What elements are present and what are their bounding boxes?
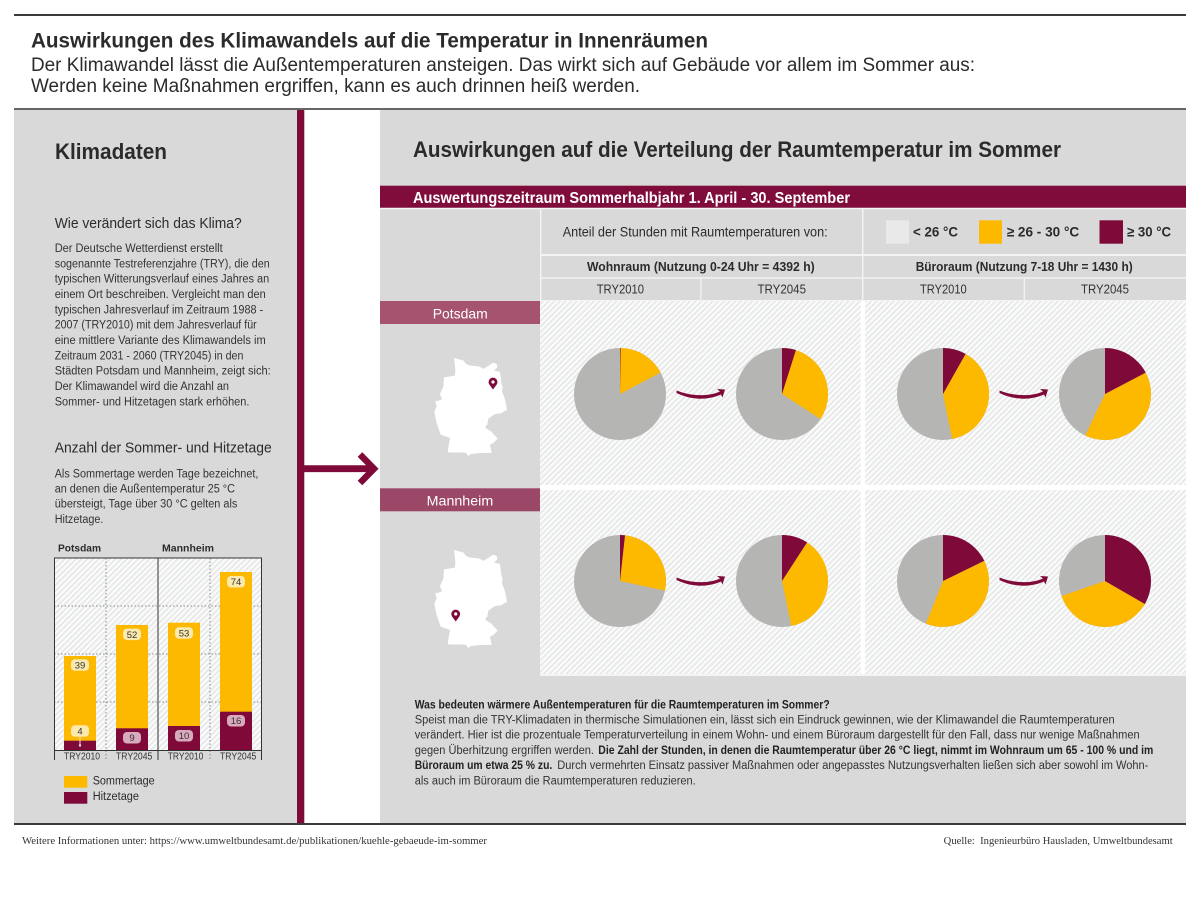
legend: temperature bands bbox=[886, 220, 1171, 244]
heading: Klimadaten: Klimadaten bbox=[55, 139, 167, 164]
text block: test reference years: Städten Potsdam und Mannheim, zeigt sich: bbox=[55, 366, 271, 378]
text block: definition of days bbox=[55, 468, 258, 526]
pie: Mannheim Wohnraum TRY2045 bbox=[736, 535, 828, 627]
label: Mannheim: Mannheim bbox=[427, 493, 493, 509]
column header: Büroraum: Büroraum (Nutzung 7-18 Uhr = 1430 h) bbox=[916, 260, 1133, 274]
bar: Mannheim TRY2045: 74 bbox=[231, 577, 241, 588]
pie: Potsdam Wohnraum TRY2045 bbox=[736, 348, 828, 440]
bar: Mannheim TRY2010: 10 bbox=[179, 731, 189, 742]
subheading: climate question: Wie verändert sich das Klima? bbox=[55, 216, 242, 232]
chart column headings: Mannheim bbox=[162, 543, 214, 555]
bar: Mannheim TRY2045 bbox=[220, 572, 252, 750]
text block: explanation of room temperatures: Büroraum um etwa 25 % zu. bbox=[415, 760, 552, 772]
text block: test reference years: typischen Witterungsverlauf eines Jahres an bbox=[55, 274, 269, 286]
panel: room temperature distribution bbox=[380, 110, 1186, 823]
chart column headings bbox=[58, 543, 214, 555]
text block: test reference years: einem Ort beschreiben. Vergleicht man den bbox=[55, 289, 266, 301]
caption: share of hours: Anteil der Stunden mit Raumtemperaturen von: bbox=[563, 225, 828, 240]
map: Germany with Mannheim marker bbox=[434, 550, 507, 648]
label: Potsdam bbox=[380, 301, 540, 324]
arrow: Potsdam Büroraum bbox=[1000, 389, 1048, 399]
bar: Potsdam TRY2045 bbox=[116, 625, 148, 750]
row: Potsdam bbox=[380, 301, 1186, 485]
pie: Potsdam Büroraum TRY2010 bbox=[897, 348, 989, 440]
column sub-headers: scenarios: TRY2010 bbox=[920, 281, 967, 296]
pie: Mannheim Büroraum TRY2010 bbox=[897, 535, 989, 627]
chart legend bbox=[64, 776, 155, 804]
chart legend: Hitzetage bbox=[93, 791, 139, 803]
column sub-headers: scenarios: TRY2010 bbox=[597, 281, 644, 296]
chart x-axis labels bbox=[64, 751, 257, 762]
chart x-axis labels: TRY2045 bbox=[220, 751, 257, 762]
column sub-headers: scenarios: TRY2045 bbox=[1081, 281, 1129, 296]
bar: Mannheim TRY2045: 16 bbox=[231, 716, 241, 727]
bar: Potsdam TRY2045: 52 bbox=[127, 630, 137, 641]
bar: Potsdam TRY2045: 9 bbox=[129, 733, 135, 744]
text block: explanation of room temperatures: verändert. Hier ist die prozentuale Temperaturverteilung in einem Wohn- und einem Büroraum dargestellt für den Fall, dass nur wenige Maßnahmen bbox=[415, 730, 1140, 742]
text block: test reference years: Sommer- und Hitzetagen stark erhöhen. bbox=[55, 396, 249, 408]
footer: source: Quelle: Ingenieurbüro Hausladen, Umweltbundesamt bbox=[944, 836, 1173, 847]
heading: room temperature distribution: Auswirkungen auf die Verteilung der Raumtemperatur im Sommer bbox=[413, 137, 1061, 162]
text block: definition of days: Als Sommertage werden Tage bezeichnet, bbox=[55, 468, 258, 480]
title: Auswirkungen des Klimawandels auf die Temperatur in Innenräumen bbox=[31, 30, 708, 52]
pie: Mannheim Büroraum TRY2045 bbox=[1059, 535, 1151, 627]
text block: definition of days: Hitzetage. bbox=[55, 514, 103, 526]
band: evaluation period bbox=[380, 186, 1186, 208]
chart x-axis labels: TRY2010 bbox=[64, 751, 100, 762]
text block: test reference years: 2007 (TRY2010) mit dem Jahresverlauf für bbox=[55, 320, 257, 332]
subtitle bbox=[31, 55, 975, 97]
bar chart: summer and heat days bbox=[54, 543, 262, 762]
row: Mannheim bbox=[380, 485, 1186, 676]
text block: explanation of room temperatures bbox=[415, 699, 1153, 787]
text block: test reference years bbox=[55, 243, 271, 408]
pie: Mannheim Wohnraum TRY2010 bbox=[574, 535, 666, 627]
subheading: number of days: Anzahl der Sommer- und Hitzetage bbox=[55, 440, 272, 457]
bar: Mannheim TRY2010: 53 bbox=[179, 628, 189, 639]
text block: explanation of room temperatures: gegen Überhitzung ergriffen werden. bbox=[415, 745, 594, 757]
text block: test reference years: Der Klimawandel wird die Anzahl an bbox=[55, 381, 229, 393]
text block: test reference years: sogenannte Testreferenzjahre (TRY), die den bbox=[55, 258, 270, 270]
bar: Potsdam TRY2010 bbox=[64, 656, 96, 750]
arrow: Mannheim Wohnraum bbox=[676, 576, 725, 586]
text block: test reference years: Zeitraum 2031 - 2060 (TRY2045) in den bbox=[55, 350, 243, 362]
text block: explanation of room temperatures: Was bedeuten wärmere Außentemperaturen für die Raumtemperaturen im Sommer? bbox=[415, 699, 830, 711]
subtitle: Der Klimawandel lässt die Außentemperaturen ansteigen. Das wirkt sich auf Gebäude vor allem im Sommer aus: bbox=[31, 55, 975, 76]
pie: Potsdam Wohnraum TRY2010 bbox=[574, 348, 666, 440]
bar: Potsdam TRY2010: 4 bbox=[77, 726, 83, 738]
chart column headings: Potsdam bbox=[58, 543, 101, 555]
arrow: Mannheim Büroraum bbox=[1000, 576, 1048, 586]
text block: test reference years: Der Deutsche Wetterdienst erstellt bbox=[55, 243, 223, 255]
text block: definition of days: übersteigt, Tage über 30 °C gelten als bbox=[55, 499, 238, 511]
text block: explanation of room temperatures: Speist man die TRY-Klimadaten in thermische Simulationen ein, lässt sich ein Eindruck gewinnen, wie der Klimawandel die Raumtemperaturen bbox=[415, 714, 1115, 726]
panel: Klimadaten bbox=[14, 110, 297, 823]
text block: test reference years: typischen Jahresverlauf im Zeitraum 1988 - bbox=[55, 304, 263, 316]
column sub-headers: scenarios bbox=[597, 281, 1129, 296]
column sub-headers: scenarios: TRY2045 bbox=[758, 281, 806, 296]
bar: Potsdam TRY2010: 39 bbox=[75, 660, 85, 672]
legend: temperature bands: < 26 °C bbox=[913, 224, 958, 240]
band: evaluation period: Auswertungszeitraum Sommerhalbjahr 1. April - 30. September bbox=[413, 190, 850, 207]
arrow: Potsdam Wohnraum bbox=[676, 389, 725, 399]
column header: Wohnraum: Wohnraum (Nutzung 0-24 Uhr = 4392 h) bbox=[587, 260, 815, 274]
header: title and subtitle bbox=[31, 30, 975, 97]
label: Mannheim bbox=[380, 488, 540, 511]
label: Potsdam: Potsdam bbox=[433, 305, 488, 321]
bar: Mannheim TRY2010 bbox=[168, 623, 200, 750]
text block: explanation of room temperatures: Durch vermehrten Einsatz passiver Maßnahmen oder angepasstes Nutzungsverhalten ließen sich aber sowohl im Wohn- bbox=[557, 760, 1148, 772]
text block: explanation of room temperatures: Die Zahl der Stunden, in denen die Raumtemperatur über 26 °C liegt, nimmt im Wohnraum um 65 - 100 % und im bbox=[598, 745, 1153, 757]
text block: test reference years: eine mittlere Variante des Klimawandels im bbox=[55, 335, 266, 347]
map: Germany with Potsdam marker bbox=[434, 358, 507, 456]
chart legend: Sommertage bbox=[93, 776, 155, 788]
legend: temperature bands: ≥ 30 °C bbox=[1127, 224, 1171, 240]
legend: temperature bands: ≥ 26 - 30 °C bbox=[1007, 224, 1079, 240]
chart x-axis labels: TRY2010 bbox=[168, 751, 204, 762]
arrow: from climate data to room temperature bbox=[297, 110, 375, 823]
chart x-axis labels: TRY2045 bbox=[116, 751, 153, 762]
text block: explanation of room temperatures: als auch im Büroraum die Raumtemperaturen reduzieren. bbox=[415, 775, 696, 787]
subtitle: Werden keine Maßnahmen ergriffen, kann es auch drinnen heiß werden. bbox=[31, 76, 640, 97]
footer: more information: Weitere Informationen unter: https://www.umweltbundesamt.de/publikationen/kuehle-gebaeude-im-sommer bbox=[22, 836, 488, 847]
pie: Potsdam Büroraum TRY2045 bbox=[1059, 348, 1151, 440]
text block: definition of days: an denen die Außentemperatur 25 °C bbox=[55, 484, 235, 496]
